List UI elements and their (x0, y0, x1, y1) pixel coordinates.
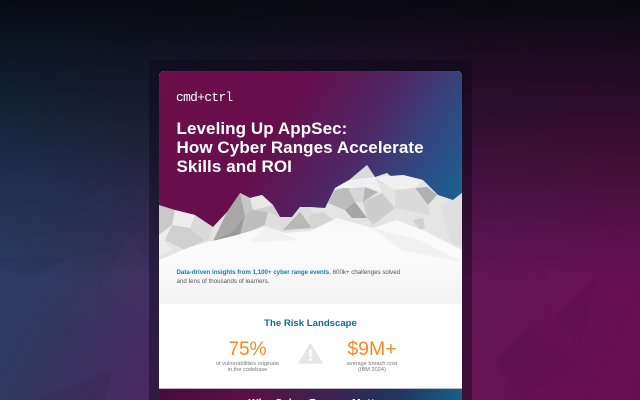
title: Skills and ROI (176, 157, 292, 176)
panel: the risk landscape (159, 304, 462, 388)
title (176, 118, 424, 176)
title: How Cyber Ranges Accelerate (176, 138, 424, 157)
stat: 75% (216, 339, 279, 373)
stat: 75%: of vulnerabilities originate (216, 361, 279, 367)
intro text (176, 269, 400, 285)
stat: $9M+: $9M+ (347, 338, 397, 360)
card (159, 71, 462, 400)
intro text: and tens of thousands of learners. (176, 278, 269, 285)
card frame (149, 60, 472, 400)
logo: cmd+ctrl (176, 90, 233, 105)
panel: why cyber ranges matter (159, 388, 462, 400)
heading: The Risk Landscape (264, 318, 357, 329)
stat: $9M+ (346, 338, 398, 373)
title: Leveling Up AppSec: (176, 118, 347, 138)
hero gradient panel (159, 71, 462, 231)
stat: 75%: 75% (228, 339, 267, 360)
stat: 75%: in the codebase (228, 367, 267, 373)
icon: warning (298, 343, 323, 364)
stat: $9M+: average breach cost (347, 361, 397, 367)
stat: $9M+: (IBM 2024) (358, 367, 386, 373)
intro text: Data-driven insights from 1,100+ cyber range events, 600k+ challenges solved (176, 269, 400, 276)
illustration: low-poly mountains (159, 165, 462, 304)
